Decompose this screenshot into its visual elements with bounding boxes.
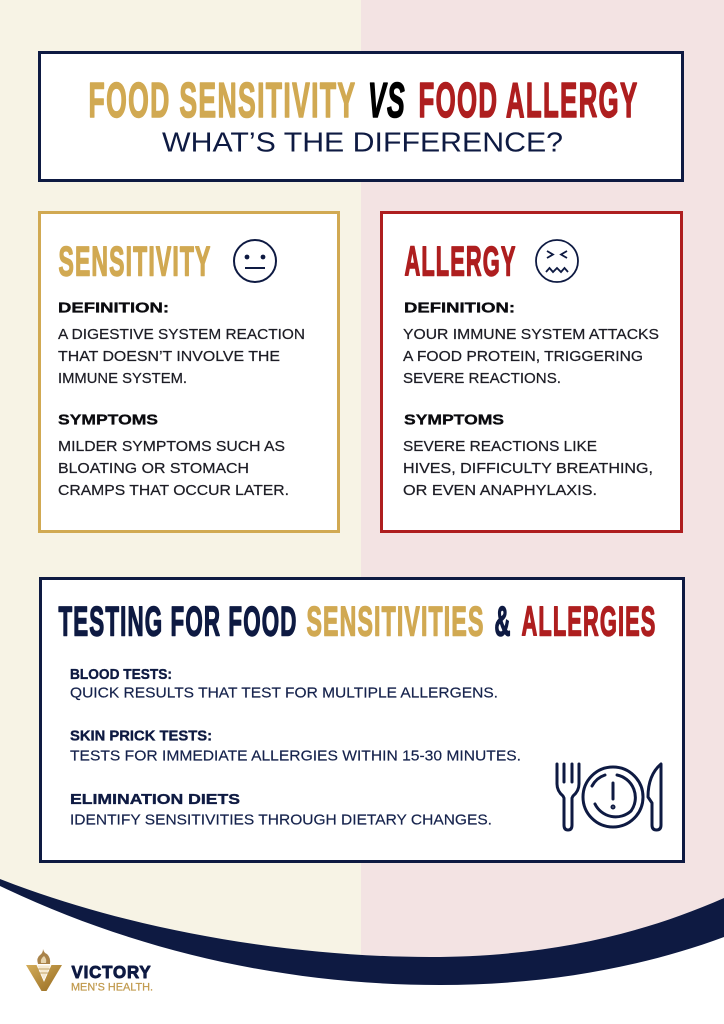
panel: sensitivity — [40, 212, 338, 532]
text block: definition: A FOOD PROTEIN, TRIGGERING — [403, 349, 643, 365]
heading: testing for food sensitivities and allergies: TESTING FOR FOOD — [58, 598, 298, 644]
text block: definition: DEFINITION: — [404, 300, 515, 316]
text block: definition: IMMUNE SYSTEM. — [58, 371, 187, 387]
heading: testing for food sensitivities and allergies: & — [494, 598, 512, 644]
text block: symptoms: SEVERE REACTIONS LIKE — [403, 439, 597, 455]
icon: neutral face — [234, 240, 276, 282]
icon: logo V with flame — [26, 949, 62, 991]
icon: distressed face — [536, 240, 578, 282]
text block: definition: YOUR IMMUNE SYSTEM ATTACKS — [403, 327, 659, 343]
heading: food sensitivity vs food allergy: VS — [368, 74, 406, 128]
text block: symptoms: CRAMPS THAT OCCUR LATER. — [58, 483, 289, 499]
text block: skin prick tests — [70, 728, 521, 764]
logo: victory men's health — [26, 949, 153, 994]
heading: sensitivity: SENSITIVITY — [58, 238, 212, 284]
icon: fork, plate with exclamation, knife — [557, 764, 661, 830]
panel: testing — [40, 578, 684, 862]
subtitle: WHAT’S THE DIFFERENCE? — [162, 126, 563, 158]
text block: skin prick tests: TESTS FOR IMMEDIATE ALLERGIES WITHIN 15-30 MINUTES. — [70, 748, 521, 764]
heading: food sensitivity vs food allergy: FOOD SENSITIVITY — [88, 74, 356, 128]
text block: symptoms — [58, 412, 289, 499]
text block: symptoms: SYMPTOMS — [58, 412, 158, 428]
text block: definition — [403, 300, 659, 387]
footer white area with navy curve — [0, 879, 724, 1024]
text block: symptoms: MILDER SYMPTOMS SUCH AS — [58, 439, 285, 455]
text block: symptoms: BLOATING OR STOMACH — [58, 461, 249, 477]
wordmark — [71, 962, 153, 994]
text block: definition — [58, 300, 305, 387]
text block: symptoms: OR EVEN ANAPHYLAXIS. — [403, 483, 597, 499]
text block: elimination diets — [70, 792, 492, 828]
text block: elimination diets: IDENTIFY SENSITIVITIES THROUGH DIETARY CHANGES. — [70, 812, 492, 828]
text block: blood tests — [70, 667, 498, 702]
text block: blood tests: QUICK RESULTS THAT TEST FOR MULTIPLE ALLERGENS. — [70, 686, 498, 702]
text block: elimination diets: ELIMINATION DIETS — [70, 792, 240, 808]
panel: title — [40, 52, 682, 180]
wordmark: MEN’S HEALTH. — [71, 982, 153, 994]
text block: symptoms — [403, 412, 653, 499]
text block: blood tests: BLOOD TESTS: — [70, 667, 172, 683]
text block: symptoms: HIVES, DIFFICULTY BREATHING, — [403, 461, 653, 477]
text block: definition: DEFINITION: — [58, 300, 169, 316]
heading: allergy: ALLERGY — [404, 238, 516, 284]
wordmark: VICTORY — [72, 962, 152, 982]
text block: definition: THAT DOESN’T INVOLVE THE — [58, 349, 280, 365]
text block: symptoms: SYMPTOMS — [404, 412, 504, 428]
text block: skin prick tests: SKIN PRICK TESTS: — [70, 728, 212, 744]
text block: definition: A DIGESTIVE SYSTEM REACTION — [58, 327, 305, 343]
heading: testing for food sensitivities and allergies: SENSITIVITIES — [306, 598, 484, 644]
panel: allergy — [382, 212, 682, 532]
text block: definition: SEVERE REACTIONS. — [403, 371, 561, 387]
